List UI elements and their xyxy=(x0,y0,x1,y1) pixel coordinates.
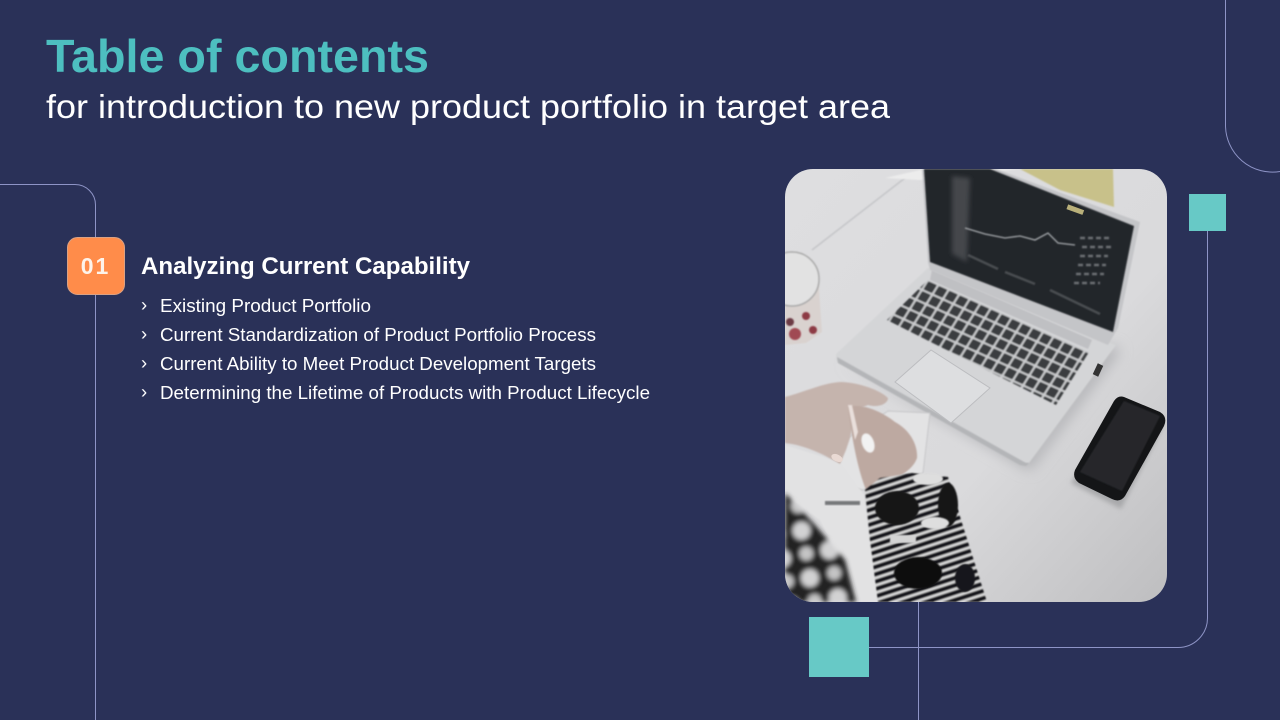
list item 2: Current Standardization of Product Portfolio Process xyxy=(160,324,596,345)
second plaid sleeve xyxy=(785,493,856,602)
decorative outline: below photo xyxy=(918,602,920,720)
list item 4: Determining the Lifetime of Products with Product Lifecycle xyxy=(160,382,650,403)
teal square: top right xyxy=(1189,194,1226,231)
section number badge: 01 xyxy=(81,253,110,279)
decorative outline: right and bottom xyxy=(869,231,1208,648)
hands xyxy=(785,382,917,490)
title: Table of contents xyxy=(46,30,429,82)
plaid sleeve xyxy=(865,473,987,602)
yellow folder xyxy=(1020,169,1114,207)
laptop side port xyxy=(1093,363,1103,377)
contents list xyxy=(141,294,650,403)
notebook xyxy=(858,410,930,490)
decorative outline: top right xyxy=(1225,0,1280,172)
phone xyxy=(1071,396,1165,509)
photo: laptop on a white desk xyxy=(765,169,1167,602)
list item 1: Existing Product Portfolio xyxy=(160,295,371,316)
laptop screen xyxy=(922,169,1140,345)
list item 3: › xyxy=(141,352,147,373)
section number badge xyxy=(68,238,124,294)
trackpad xyxy=(895,350,990,423)
section heading: Analyzing Current Capability xyxy=(141,253,471,280)
list item 1: › xyxy=(141,294,147,315)
list item 2: › xyxy=(141,323,147,344)
teal square: bottom xyxy=(809,617,869,677)
laptop base xyxy=(840,308,1114,463)
keyboard xyxy=(887,280,1089,405)
laptop shadow xyxy=(902,345,1120,472)
coffee cup xyxy=(785,250,822,345)
list item 4: › xyxy=(141,381,147,402)
pen xyxy=(825,501,860,505)
screen chart xyxy=(965,228,1075,245)
decorative outline: left xyxy=(0,184,96,720)
subtitle: for introduction to new product portfolio in target area xyxy=(46,88,891,125)
paper sheet xyxy=(834,464,876,602)
list item 3: Current Ability to Meet Product Development Targets xyxy=(160,353,596,374)
